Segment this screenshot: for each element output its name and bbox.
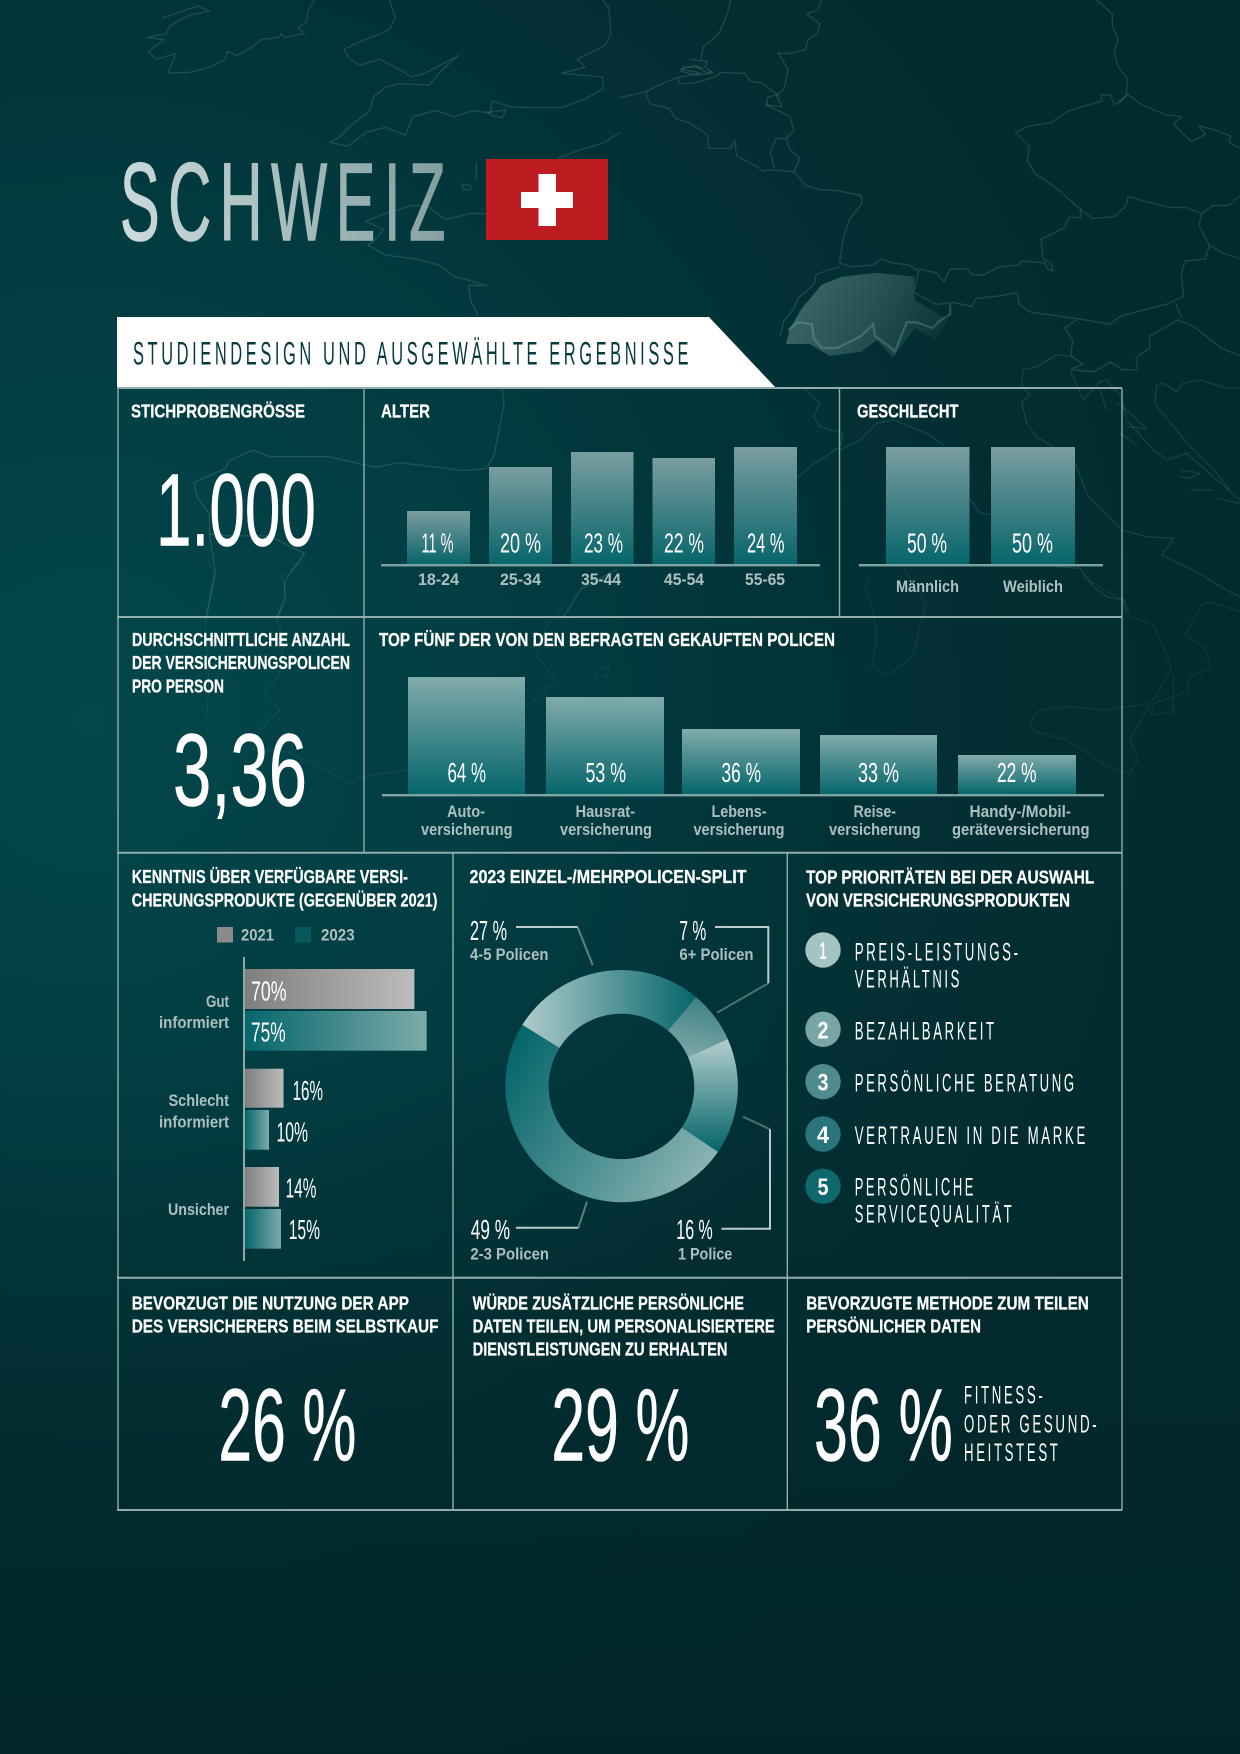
panel: top priorities list: 1 xyxy=(820,938,826,965)
panel: top five policies chart: 22 % xyxy=(997,757,1036,788)
panel: sharing personal data: DIENSTLEISTUNGEN ZU ERHALTEN xyxy=(473,1339,728,1359)
panel: top priorities list: VERHÄLTNIS xyxy=(855,965,962,993)
panel: age chart: 35-44 xyxy=(581,571,622,589)
panel: top five policies chart: 33 % xyxy=(858,757,899,788)
panel: preferred sharing method: PERSÖNLICHER DATEN xyxy=(806,1316,981,1336)
panel: app preference xyxy=(132,1293,439,1483)
panel: product awareness bar chart: informiert xyxy=(159,1014,229,1032)
panel: sharing personal data xyxy=(473,1293,775,1483)
panel: product awareness bar chart: 16% xyxy=(293,1075,323,1106)
panel: age chart xyxy=(381,402,820,589)
panel: sharing personal data: 29 % xyxy=(551,1368,689,1483)
panel: top five policies chart: Hausrat- xyxy=(576,803,635,821)
icon: swiss flag xyxy=(486,159,608,240)
panel: app preference: DES VERSICHERERS BEIM SELBSTKAUF xyxy=(132,1316,439,1336)
panel: top five policies chart: versicherung xyxy=(421,821,512,839)
panel: product awareness bar chart: Gut xyxy=(206,993,229,1011)
panel: product awareness bar chart: 14% xyxy=(286,1173,316,1204)
panel: single and multi policy donut chart: 6+ Policen xyxy=(679,946,754,964)
panel: single and multi policy donut chart: 2-3 Policen xyxy=(470,1245,549,1263)
panel: top priorities list: PREIS-LEISTUNGS- xyxy=(855,939,1021,967)
panel: product awareness bar chart: CHERUNGSPRODUKTE (GEGENÜBER 2021) xyxy=(132,891,437,911)
panel: single and multi policy donut chart: 2023 EINZEL-/MEHRPOLICEN-SPLIT xyxy=(470,867,747,887)
panel: average number of policies: PRO PERSON xyxy=(132,677,224,697)
panel: gender chart: Männlich xyxy=(896,578,959,596)
panel: age chart: 24 % xyxy=(747,528,784,558)
panel: top five policies chart: 36 % xyxy=(722,757,761,788)
panel: app preference: BEVORZUGT DIE NUTZUNG DER APP xyxy=(132,1293,409,1313)
panel: gender chart: GESCHLECHT xyxy=(857,402,958,422)
panel: top priorities list xyxy=(805,867,1094,1229)
panel: preferred sharing method: HEITSTEST xyxy=(964,1439,1060,1467)
section banner xyxy=(117,317,776,388)
panel: gender chart: Weiblich xyxy=(1003,578,1063,596)
panel: top priorities list: TOP PRIORITÄTEN BEI DER AUSWAHL xyxy=(806,867,1094,887)
panel: top five policies chart: Reise- xyxy=(854,803,896,821)
panel: top five policies chart: versicherung xyxy=(694,821,784,839)
map of europe outlines xyxy=(146,0,1240,783)
panel: gender chart: 50 % xyxy=(907,528,947,558)
panel: top five policies chart: TOP FÜNF DER VON DEN BEFRAGTEN GEKAUFTEN POLICEN xyxy=(379,630,835,650)
panel: age chart: 11 % xyxy=(422,528,454,558)
panel: age chart: 18-24 xyxy=(418,571,460,589)
panel: age chart: 45-54 xyxy=(664,571,705,589)
panel: top five policies chart: 53 % xyxy=(586,757,626,788)
panel: age chart: ALTER xyxy=(381,402,430,422)
switzerland highlight xyxy=(786,273,950,358)
panel: product awareness bar chart: 2021 xyxy=(241,927,274,945)
panel: product awareness bar chart: informiert xyxy=(159,1113,229,1131)
panel: sample size: STICHPROBENGRÖSSE xyxy=(131,402,305,422)
panel: preferred sharing method xyxy=(806,1293,1099,1483)
panel: top five policies chart: Auto- xyxy=(447,803,485,821)
panel: preferred sharing method: BEVORZUGTE METHODE ZUM TEILEN xyxy=(806,1293,1089,1313)
panel: product awareness bar chart: 2023 xyxy=(321,927,355,945)
panel: top priorities list: 4 xyxy=(817,1122,830,1149)
panel: top priorities list: 3 xyxy=(818,1070,828,1096)
panel: product awareness bar chart: KENNTNIS ÜBER VERFÜGBARE VERSI- xyxy=(132,867,408,887)
panel: top priorities list: VON VERSICHERUNGSPRODUKTEN xyxy=(806,891,1070,911)
panel: top priorities list: BEZAHLBARKEIT xyxy=(855,1018,997,1046)
panel: preferred sharing method: 36 % xyxy=(814,1368,953,1483)
panel: app preference: 26 % xyxy=(218,1368,356,1483)
panel: single and multi policy donut chart: 49 % xyxy=(471,1214,510,1245)
panel: product awareness bar chart: 75% xyxy=(251,1017,286,1048)
section banner: STUDIENDESIGN UND AUSGEWÄHLTE ERGEBNISSE xyxy=(133,336,692,372)
panel: age chart: 20 % xyxy=(500,528,541,558)
panel: age chart: 23 % xyxy=(584,528,623,558)
panel: top five policies chart: 64 % xyxy=(448,757,486,788)
panel: top priorities list: 2 xyxy=(818,1017,828,1044)
panel: product awareness bar chart: 15% xyxy=(289,1214,320,1245)
panel: top five policies chart xyxy=(379,630,1104,839)
panel: preferred sharing method: ODER GESUND- xyxy=(964,1410,1099,1438)
panel: single and multi policy donut chart xyxy=(470,867,770,1263)
panel: sharing personal data: WÜRDE ZUSÄTZLICHE PERSÖNLICHE xyxy=(473,1293,744,1313)
panel: age chart: 25-34 xyxy=(500,571,542,589)
panel: sample size xyxy=(131,402,316,568)
panel: single and multi policy donut chart: 7 % xyxy=(679,915,706,946)
panel: average number of policies: DER VERSICHERUNGSPOLICEN xyxy=(132,653,350,673)
panel: age chart: 22 % xyxy=(664,528,704,558)
title: Schweiz: SCHWEIZ xyxy=(120,141,454,264)
panel: top five policies chart: versicherung xyxy=(560,821,652,839)
panel: product awareness bar chart: 70% xyxy=(251,976,286,1007)
panel: top five policies chart: versicherung xyxy=(829,821,920,839)
panel: product awareness bar chart: Schlecht xyxy=(168,1092,229,1110)
panel: single and multi policy donut chart: 4-5 Policen xyxy=(470,946,548,964)
panel: preferred sharing method: FITNESS- xyxy=(964,1381,1045,1409)
panel: single and multi policy donut chart: 1 Police xyxy=(678,1245,732,1263)
panel: average number of policies xyxy=(132,630,350,828)
panel: product awareness bar chart xyxy=(132,867,437,1261)
panel: top five policies chart: Lebens- xyxy=(712,803,766,821)
panel: gender chart: 50 % xyxy=(1012,528,1053,558)
panel: age chart: 55-65 xyxy=(745,571,785,589)
panel: top five policies chart: geräteversicherung xyxy=(952,821,1090,839)
panel: top priorities list: SERVICEQUALITÄT xyxy=(855,1201,1014,1229)
results grid frame xyxy=(117,388,1122,1510)
panel: top priorities list: PERSÖNLICHE xyxy=(855,1174,976,1202)
panel: product awareness bar chart: 10% xyxy=(276,1117,308,1148)
panel: top five policies chart: Handy-/Mobil- xyxy=(970,803,1071,821)
panel: sample size: 1.000 xyxy=(156,452,316,568)
panel: sharing personal data: DATEN TEILEN, UM PERSONALISIERTERE xyxy=(473,1316,775,1336)
panel: product awareness bar chart: Unsicher xyxy=(168,1201,229,1219)
panel: single and multi policy donut chart: 16 % xyxy=(676,1214,713,1245)
panel: gender chart xyxy=(857,402,1103,596)
panel: average number of policies: DURCHSCHNITTLICHE ANZAHL xyxy=(132,630,350,650)
panel: average number of policies: 3,36 xyxy=(173,712,307,828)
panel: single and multi policy donut chart: 27 % xyxy=(470,915,507,946)
panel: top priorities list: 5 xyxy=(818,1174,828,1201)
